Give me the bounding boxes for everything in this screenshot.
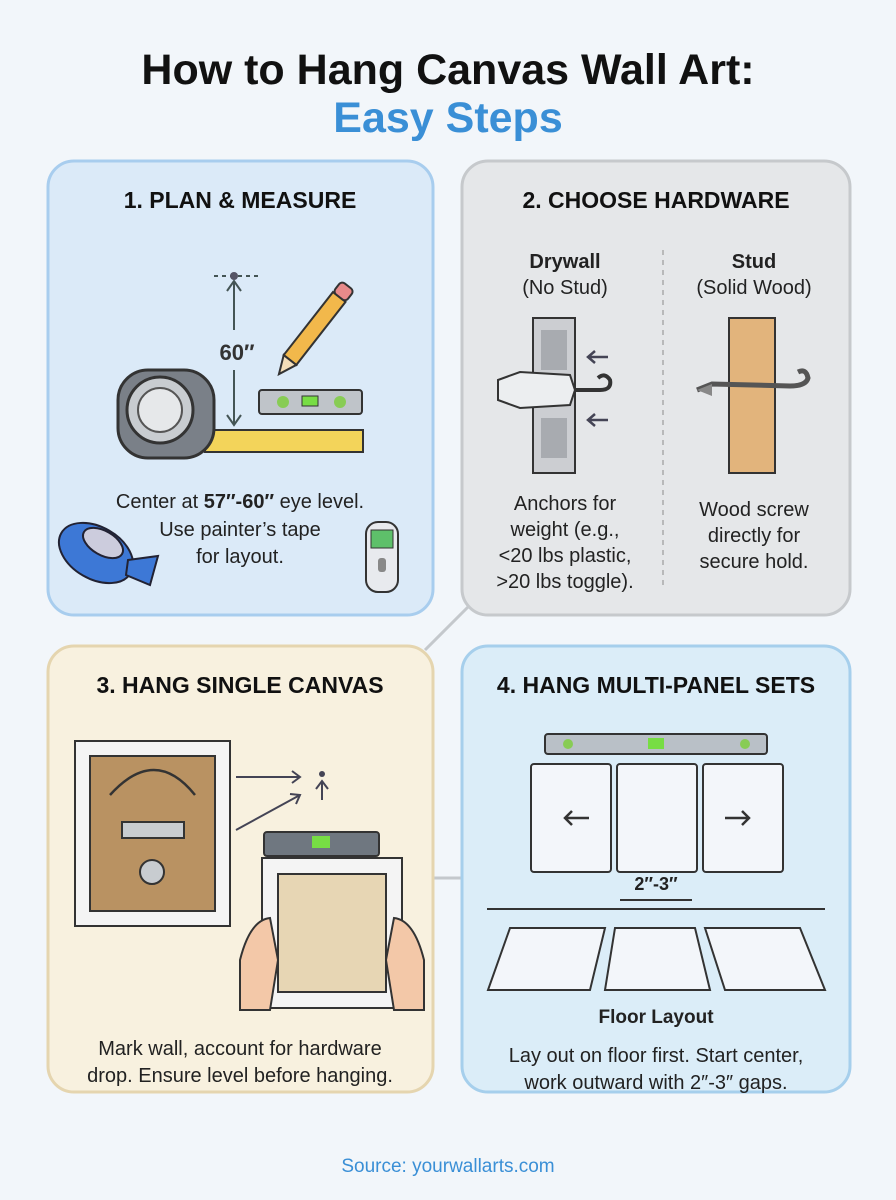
panel: choose hardware: secure hold. xyxy=(700,551,808,573)
icon: pencil xyxy=(273,281,354,379)
text: step 3 xyxy=(87,1038,393,1087)
text: step 4: Lay out on floor first. Start center, xyxy=(509,1045,803,1067)
text: step 1: Use painter’s tape xyxy=(159,519,321,541)
panel: choose hardware: Wood screw xyxy=(699,499,809,521)
drywall column: Drywall xyxy=(529,251,601,273)
title: How to Hang Canvas Wall Art: xyxy=(141,46,755,94)
panel: choose hardware xyxy=(462,161,850,615)
panel: hang single canvas: 3. HANG SINGLE CANVAS xyxy=(96,672,384,698)
text: step 3: Mark wall, account for hardware xyxy=(98,1038,382,1060)
panel: plan & measure xyxy=(48,161,433,615)
panel: choose hardware: Anchors for xyxy=(514,493,616,515)
gap label xyxy=(620,874,692,900)
icon: height arrow xyxy=(214,276,258,425)
icon: wood stud screw xyxy=(697,318,808,473)
title: Easy Steps xyxy=(333,94,563,142)
drywall column xyxy=(522,251,608,299)
text: step 4 xyxy=(509,1045,803,1094)
panel: plan & measure: 60″ xyxy=(219,340,255,365)
gap label: 2″-3″ xyxy=(634,874,678,894)
icon: drywall anchor xyxy=(498,318,610,473)
icon: painter's tape xyxy=(48,510,158,596)
panel: multi-panel sets xyxy=(462,646,850,1094)
connector lines xyxy=(425,605,470,878)
text: step 1: for layout. xyxy=(196,546,284,568)
panel: choose hardware: directly for xyxy=(708,525,800,547)
icon: floor panels xyxy=(488,928,825,990)
title xyxy=(141,46,755,142)
panel: choose hardware: weight (e.g., xyxy=(510,519,619,541)
text: step 4: work outward with 2″-3″ gaps. xyxy=(523,1072,788,1094)
text: step 1 xyxy=(116,491,364,568)
panel: choose hardware: >20 lbs toggle). xyxy=(496,571,634,593)
panel: plan & measure: 1. PLAN & MEASURE xyxy=(124,187,356,213)
icon: tape measure xyxy=(118,370,363,458)
panel: hang single canvas xyxy=(48,646,433,1092)
panel: choose hardware: 2. CHOOSE HARDWARE xyxy=(522,187,790,213)
panel: choose hardware: <20 lbs plastic, xyxy=(499,545,631,567)
source: Source: yourwallarts.com xyxy=(341,1156,555,1177)
text: step 1: Center at 57″-60″ eye level. xyxy=(116,491,364,513)
panel: multi-panel sets: Floor Layout xyxy=(598,1007,714,1028)
icon: canvas back xyxy=(75,741,230,926)
icon: three panels xyxy=(531,764,783,872)
stud column: Stud xyxy=(732,251,776,273)
stud column: (Solid Wood) xyxy=(696,277,812,299)
icon: level + canvas in hands xyxy=(240,832,424,1010)
drywall column: (No Stud) xyxy=(522,277,608,299)
icon: level xyxy=(259,390,362,414)
arrows xyxy=(236,771,328,830)
icon: stud finder xyxy=(366,522,398,592)
text: step 3: drop. Ensure level before hanging. xyxy=(87,1065,393,1087)
icon: long level xyxy=(545,734,767,754)
stud column xyxy=(696,251,812,299)
panel: multi-panel sets: 4. HANG MULTI-PANEL SETS xyxy=(497,672,815,698)
